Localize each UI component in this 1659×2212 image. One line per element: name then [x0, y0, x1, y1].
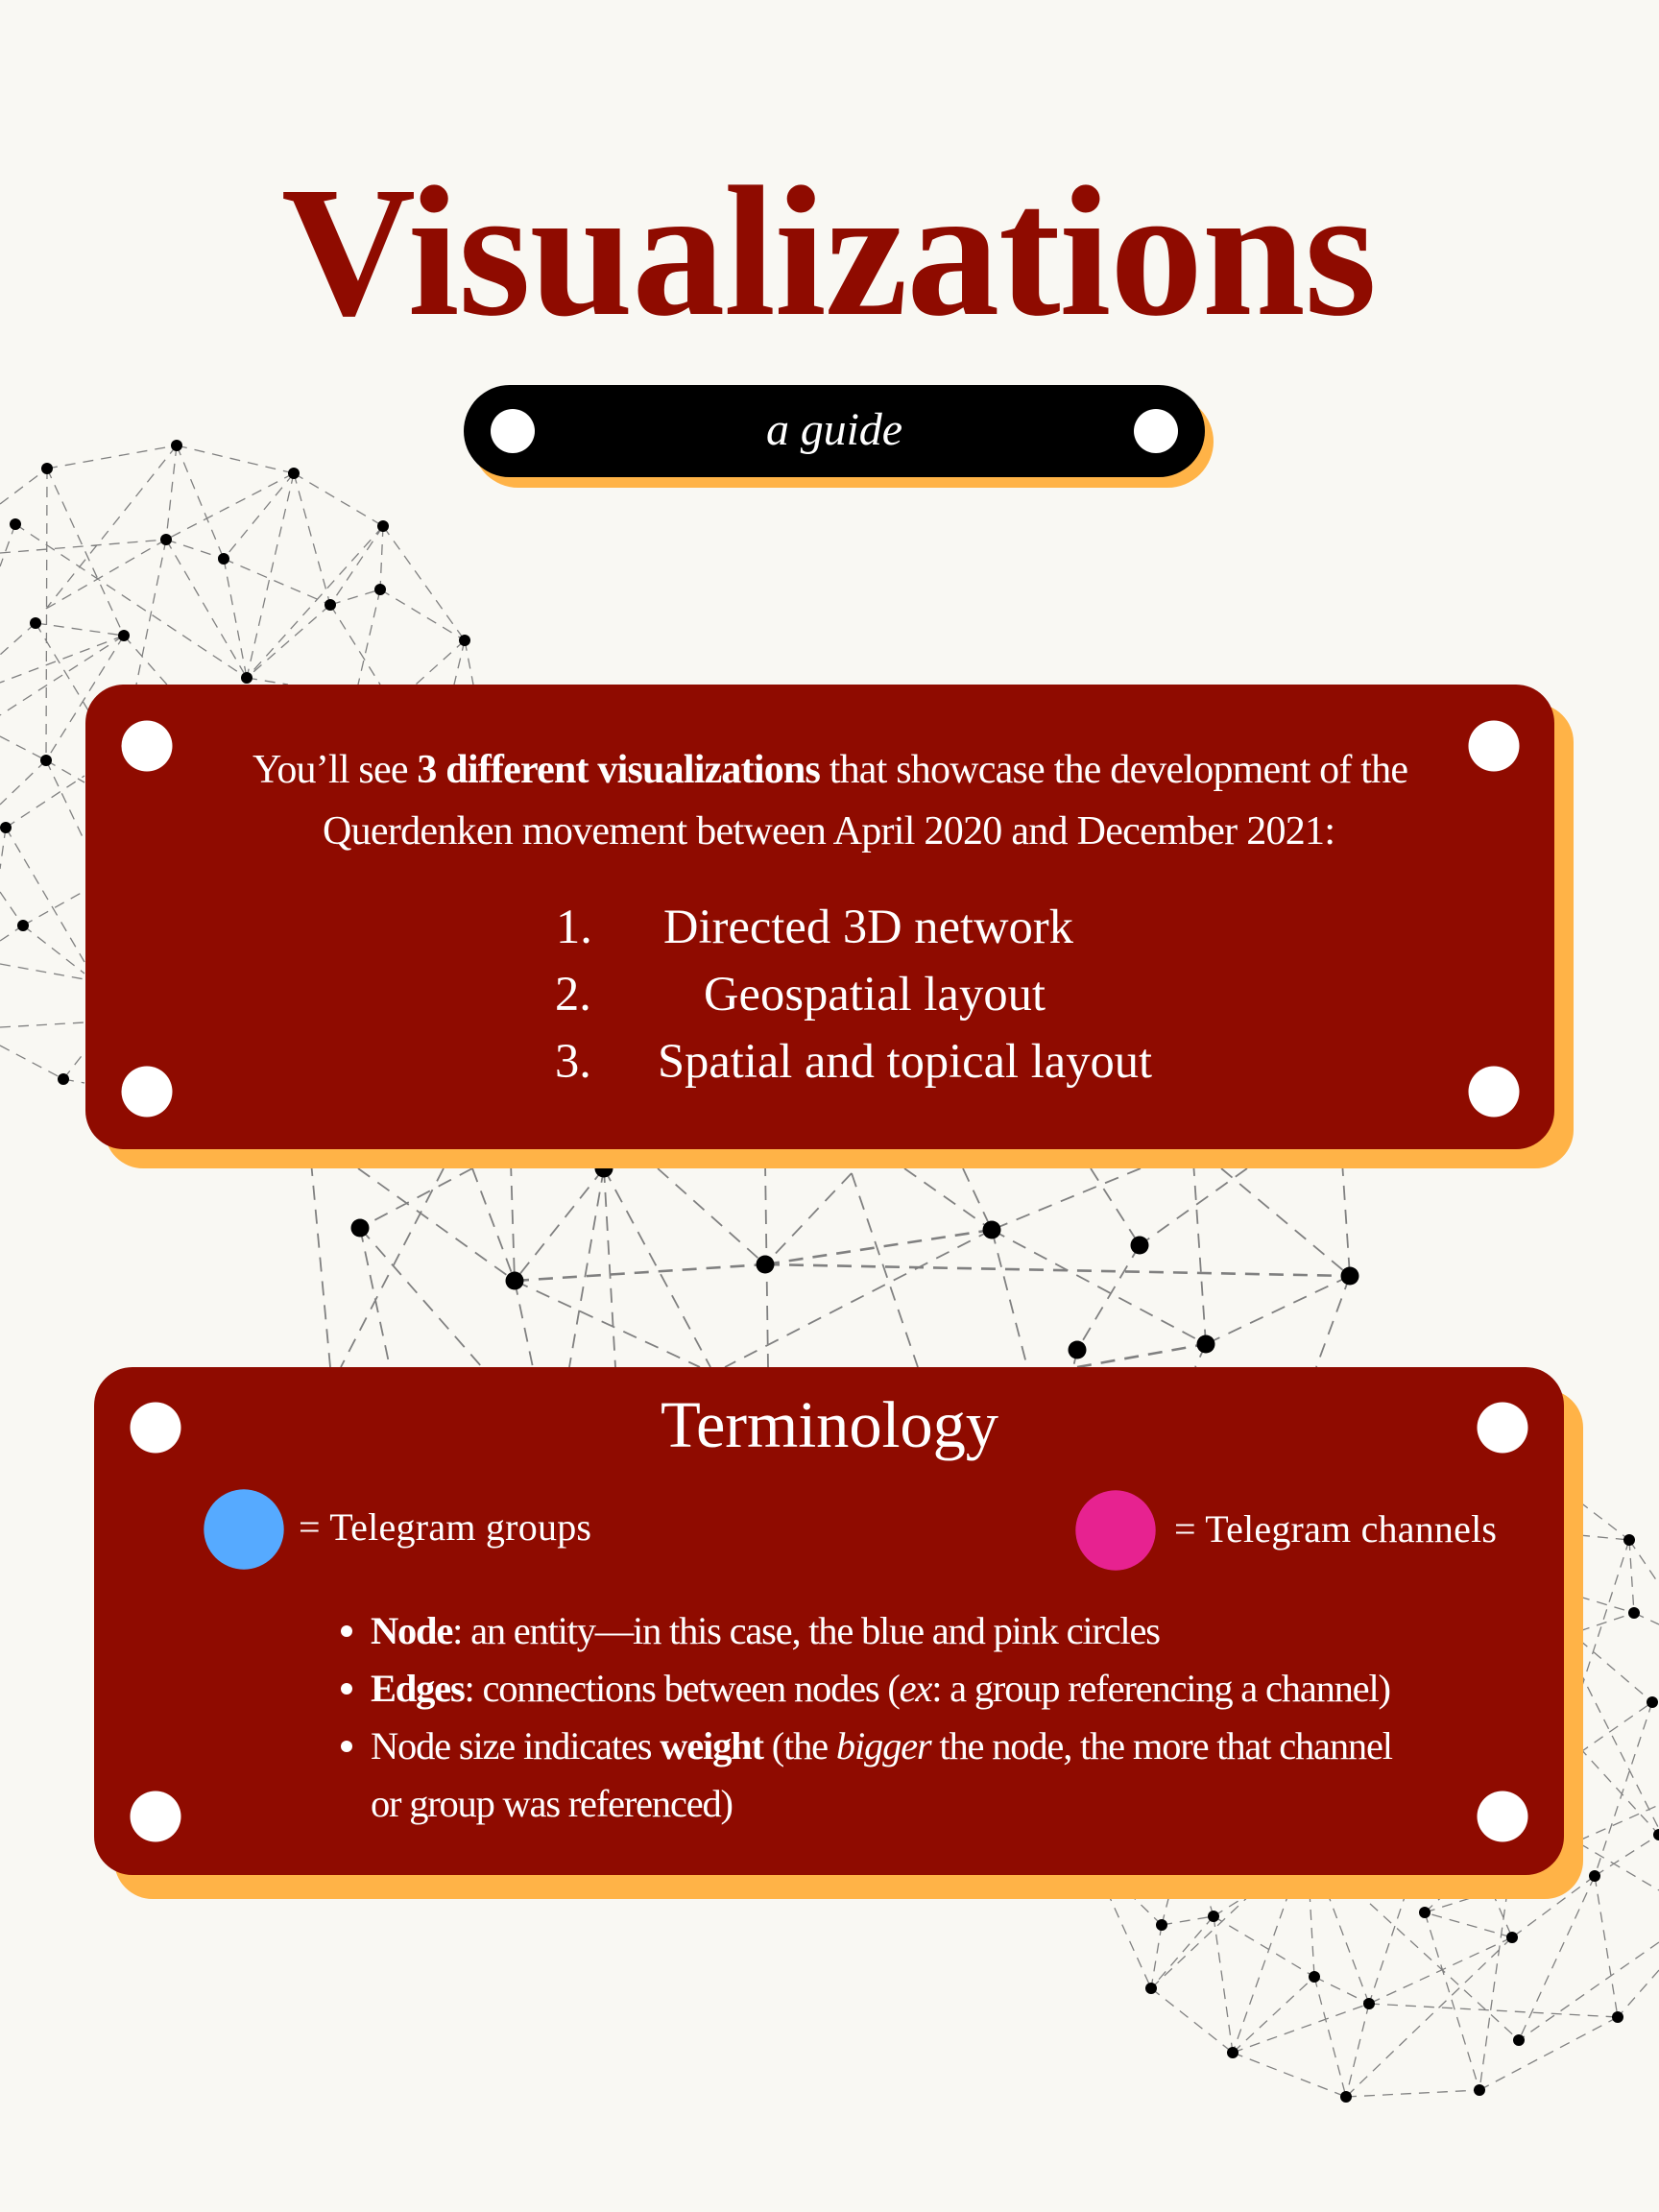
legend: telegram channels: = Telegram channels — [1174, 1507, 1497, 1551]
numbered list: 2. — [555, 967, 591, 1021]
intro text: Querdenken movement between April 2020 and December 2021: — [323, 809, 1335, 854]
network: lower right — [1107, 1502, 1659, 2103]
terminology heading: Terminology — [661, 1388, 998, 1461]
legend: telegram groups — [204, 1489, 591, 1570]
intro text — [252, 748, 1408, 854]
title: Visualizations — [281, 148, 1377, 354]
bullet list: Node size indicates weight (the bigger the node, the more that channel — [371, 1724, 1393, 1767]
network: centre — [311, 1160, 1359, 1367]
numbered list: 3. — [555, 1034, 591, 1088]
network: upper left — [0, 440, 473, 1085]
subtitle pill — [464, 385, 1214, 488]
bullet list: Edges: connections between nodes (ex: a group referencing a channel) — [371, 1667, 1391, 1710]
bullet list: Node: an entity—in this case, the blue and pink circles — [371, 1609, 1161, 1652]
numbered list: Geospatial layout — [704, 967, 1046, 1021]
panel: visualizations overview — [85, 685, 1574, 1168]
legend: telegram groups: = Telegram groups — [299, 1505, 591, 1549]
intro text: You’ll see 3 different visualizations that showcase the development of the — [252, 748, 1408, 792]
legend: telegram channels — [1075, 1490, 1497, 1571]
bullet list — [341, 1609, 1393, 1825]
numbered list: 1. — [556, 900, 592, 953]
numbered list — [555, 900, 1152, 1088]
numbered list: Spatial and topical layout — [658, 1034, 1152, 1088]
subtitle text: a guide — [766, 404, 902, 455]
numbered list: Directed 3D network — [663, 900, 1074, 953]
bullet list: or group was referenced) — [371, 1782, 733, 1825]
panel: terminology — [94, 1367, 1583, 1899]
